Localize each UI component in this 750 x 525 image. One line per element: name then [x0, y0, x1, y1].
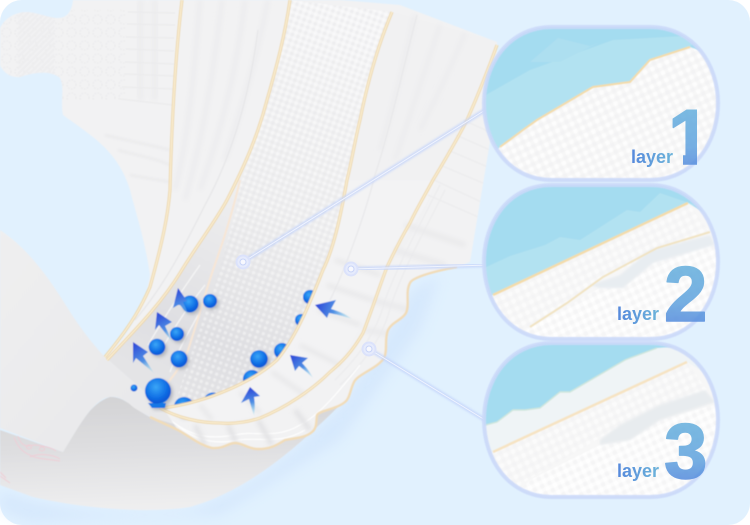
- connector: layer 3: [362, 342, 490, 423]
- connector: layer 1: [236, 107, 490, 268]
- number 1: 1: [668, 93, 711, 181]
- ruffle folds: [170, 365, 360, 442]
- number 3: 3: [664, 407, 707, 495]
- connector: layer 2: [344, 262, 490, 276]
- layer 3 label: layer: [617, 461, 659, 481]
- pill border: [484, 27, 718, 180]
- panel: layer 3: [480, 341, 725, 500]
- number 2: 2: [664, 250, 707, 338]
- front sheet: [0, 230, 180, 452]
- arrow 3: [133, 342, 154, 373]
- pill border: [484, 185, 718, 339]
- flow arrows: [133, 288, 352, 416]
- pleats between outer gold lines: [175, 0, 268, 200]
- arrow 2: [155, 312, 173, 343]
- pink print on sheet: [0, 436, 60, 483]
- gold line A: [105, 0, 182, 357]
- side tab texture: [0, 0, 175, 182]
- panel: layer 2: [480, 183, 725, 345]
- pill border: [484, 343, 718, 497]
- panel: layer 1: [480, 25, 725, 185]
- textured core: [110, 231, 314, 406]
- layer 2 label: layer: [617, 304, 659, 324]
- arrow 5: [290, 355, 313, 378]
- arrow 6: [241, 387, 260, 416]
- pale inner seam: [168, 180, 241, 383]
- inner cuff band: [160, 12, 497, 423]
- gold line B: [107, 0, 290, 360]
- large water droplet: [145, 378, 171, 408]
- gold line C: [163, 12, 392, 408]
- water droplets: [149, 290, 317, 417]
- layer 1 label: layer: [631, 147, 673, 167]
- back sheet grey fold: [0, 397, 345, 510]
- shadow under diaper: [0, 275, 440, 522]
- arrow 4: [315, 300, 352, 319]
- connector lines: [236, 107, 490, 423]
- diaper body: [0, 0, 497, 449]
- ruffle gold edging: [150, 267, 457, 449]
- diaper illustration: [0, 0, 497, 522]
- gold line D: [160, 45, 497, 423]
- right wing grid lines: [335, 120, 490, 385]
- arrow 1: [173, 288, 189, 316]
- partial droplet at sheet edge: [130, 384, 138, 392]
